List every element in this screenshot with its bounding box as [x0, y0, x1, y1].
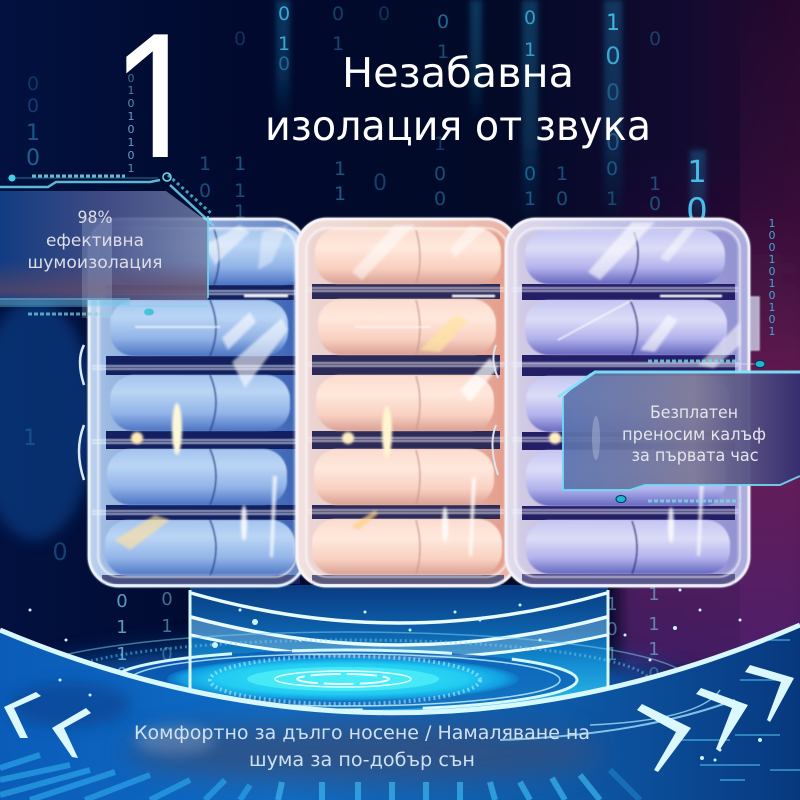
- binary code columns: 0: [278, 3, 290, 25]
- title: [265, 49, 651, 150]
- binary code columns: 1: [606, 188, 618, 210]
- binary code columns: 0: [437, 11, 449, 33]
- binary strips: 0: [768, 241, 776, 254]
- pedestal binary: 0: [606, 619, 618, 640]
- binary strips: 0: [128, 149, 134, 162]
- pedestal binary: 1: [161, 616, 173, 637]
- binary code columns: 1: [234, 201, 246, 223]
- panel text: 98% effective noise isolation: ефективна: [46, 231, 144, 251]
- binary code columns: 0: [649, 193, 661, 215]
- pedestal: [116, 584, 660, 720]
- binary code columns: 1: [649, 173, 661, 195]
- purple case highlights: [549, 222, 740, 556]
- binary code columns: 0: [524, 7, 536, 29]
- binary code columns: 1: [23, 426, 37, 451]
- binary code columns: 0: [605, 42, 621, 70]
- binary strips: 1: [768, 325, 776, 338]
- binary code columns: 1: [434, 133, 446, 155]
- glass frame: [89, 219, 305, 586]
- binary code columns: 0: [278, 53, 290, 75]
- binary code columns: 0: [199, 180, 211, 202]
- panel text: 98% effective noise isolation: шумоизолация: [28, 253, 162, 273]
- binary code columns: 0: [606, 131, 620, 156]
- title: изолация от звука: [265, 102, 651, 150]
- chevrons right: [637, 665, 794, 772]
- binary strips: 0: [768, 289, 776, 302]
- pink earplug rows: [312, 228, 502, 575]
- blue earplug rows: [105, 228, 306, 576]
- binary code columns: 1: [437, 41, 449, 63]
- case: purple earplugs: [505, 218, 759, 587]
- binary code columns: 1: [26, 121, 40, 146]
- binary code columns: 0: [234, 28, 246, 50]
- chevrons left: [4, 692, 91, 758]
- binary code columns: 0: [524, 163, 536, 185]
- binary strips: 0: [128, 97, 134, 110]
- blue case highlights: [115, 225, 288, 557]
- panel text: free carrying case for the first hour: за първата час: [632, 446, 758, 466]
- panel text: 98% effective noise isolation: [28, 208, 162, 273]
- pedestal binary: 1: [648, 639, 660, 660]
- binary code columns: 0: [649, 28, 661, 50]
- glass frame: [506, 219, 759, 586]
- binary strips: 0: [768, 265, 776, 278]
- large arc: [0, 625, 800, 713]
- panel: noise isolation: [0, 173, 214, 318]
- binary code columns: 0: [434, 163, 446, 185]
- binary code columns: 1: [234, 153, 246, 175]
- binary code columns: 1: [334, 158, 346, 180]
- binary code columns: 0: [606, 81, 620, 106]
- binary strips: 0: [128, 123, 134, 136]
- panel text: free carrying case for the first hour: [622, 403, 766, 466]
- sparkles: [28, 588, 762, 762]
- binary strips: 1: [768, 253, 776, 266]
- pedestal binary: 0: [161, 589, 173, 610]
- right swoosh lines: [500, 690, 735, 740]
- binary code columns: 0: [686, 191, 708, 231]
- binary code columns: 1: [687, 155, 707, 190]
- case: blue earplugs: [79, 218, 306, 587]
- pedestal binary: 0: [648, 664, 660, 685]
- pedestal binary: 0: [116, 664, 128, 685]
- title: Незабавна: [342, 49, 574, 97]
- panel text: free carrying case for the first hour: преносим калъф: [622, 425, 766, 445]
- binary code columns: 0: [332, 3, 344, 25]
- panel text: free carrying case for the first hour: Безплатен: [650, 403, 738, 423]
- binary glow columns: [276, 0, 706, 230]
- panel text: 98% effective noise isolation: 98%: [78, 208, 112, 228]
- bottom caption: шума за по-добър сън: [249, 749, 475, 771]
- floor rays: [0, 755, 640, 800]
- binary strips: 1: [768, 301, 776, 314]
- binary code columns: 0: [26, 146, 40, 171]
- bottom caption: Комфортно за дълго носене / Намаляване на: [134, 722, 590, 744]
- case: pink earplugs: [296, 218, 518, 587]
- binary strips: 1: [128, 136, 134, 149]
- binary code columns: [23, 3, 708, 566]
- binary code columns: 1: [278, 33, 290, 55]
- binary strips: 1: [128, 84, 134, 97]
- binary code columns: 1: [606, 11, 620, 36]
- binary strips: [128, 72, 776, 338]
- glass frame: [297, 219, 517, 586]
- binary code columns: 0: [27, 73, 39, 95]
- binary strips: 1: [128, 162, 134, 175]
- pedestal binary: 1: [648, 584, 660, 605]
- panel: free carrying case: [500, 360, 800, 502]
- binary code columns: 0: [556, 188, 568, 210]
- pedestal binary: 1: [648, 614, 660, 635]
- pedestal binary: [117, 587, 658, 676]
- pedestal binary: 1: [116, 644, 128, 665]
- pedestal binary: 0: [116, 591, 128, 612]
- binary code columns: 1: [332, 33, 344, 55]
- binary code columns: 1: [334, 183, 346, 205]
- floor: [0, 620, 800, 800]
- binary code columns: 0: [434, 188, 446, 210]
- binary code columns: 0: [606, 158, 618, 180]
- binary code columns: 1: [199, 153, 211, 175]
- binary strips: 1: [768, 277, 776, 290]
- pedestal binary: 0: [161, 644, 173, 665]
- binary code columns: 1: [524, 39, 536, 61]
- binary code columns: 0: [373, 171, 387, 196]
- binary strips: 0: [768, 313, 776, 326]
- binary code columns: 1: [524, 188, 536, 210]
- binary strips: 1: [128, 110, 134, 123]
- binary strips: 0: [768, 229, 776, 242]
- pedestal binary: 1: [606, 644, 618, 665]
- bottom caption: [134, 722, 590, 771]
- binary code columns: 0: [378, 3, 390, 25]
- glowing platform disc: [68, 590, 677, 710]
- purple earplug rows: [525, 230, 730, 574]
- pedestal binary: 1: [606, 594, 618, 615]
- floor dashes: [680, 640, 800, 780]
- binary code columns: 1: [234, 180, 246, 202]
- pink case highlights: [342, 225, 498, 556]
- binary code columns: 1: [556, 163, 568, 185]
- binary code columns: 0: [52, 538, 68, 566]
- binary strips: 1: [768, 217, 776, 230]
- binary strips: 0: [128, 72, 134, 85]
- pedestal binary: 1: [116, 617, 128, 638]
- binary code columns: 0: [27, 95, 39, 117]
